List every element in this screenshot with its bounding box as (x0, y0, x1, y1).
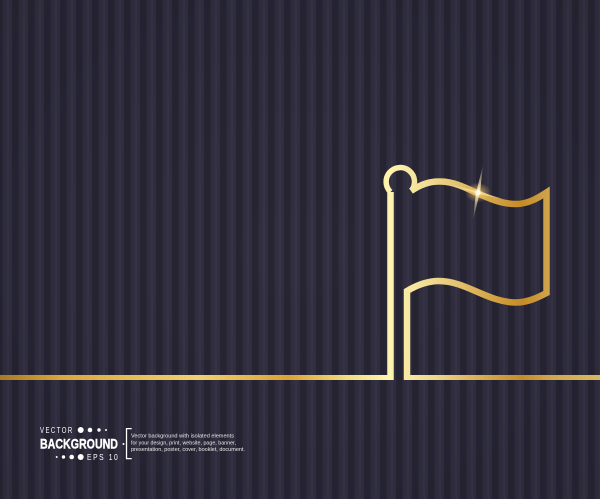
label: VECTOR with dots: VECTOR (40, 425, 74, 435)
logo block: vector background EPS 10 (40, 425, 245, 462)
description text: presentation, poster, cover, booklet, document. (131, 447, 245, 453)
right baseline (404, 375, 600, 380)
pole (387, 192, 394, 380)
icon: sparkle on flag (450, 165, 503, 220)
gold line: baseline, pole and flag outline (0, 168, 600, 380)
ring on pole (386, 168, 415, 192)
bracket dot (122, 443, 124, 445)
flag outline (407, 181, 546, 380)
bracket (126, 429, 132, 459)
description text: Vector background with isolated elements (131, 434, 234, 440)
description text: for your design, print, website, page, banner, (131, 440, 236, 446)
label: VECTOR with dots (40, 425, 107, 435)
label: BACKGROUND: BACKGROUND (40, 435, 118, 451)
left baseline (0, 375, 390, 380)
label: EPS 10 with dots (56, 452, 119, 462)
description text (131, 434, 245, 453)
label: EPS 10 with dots: EPS 10 (87, 452, 119, 462)
